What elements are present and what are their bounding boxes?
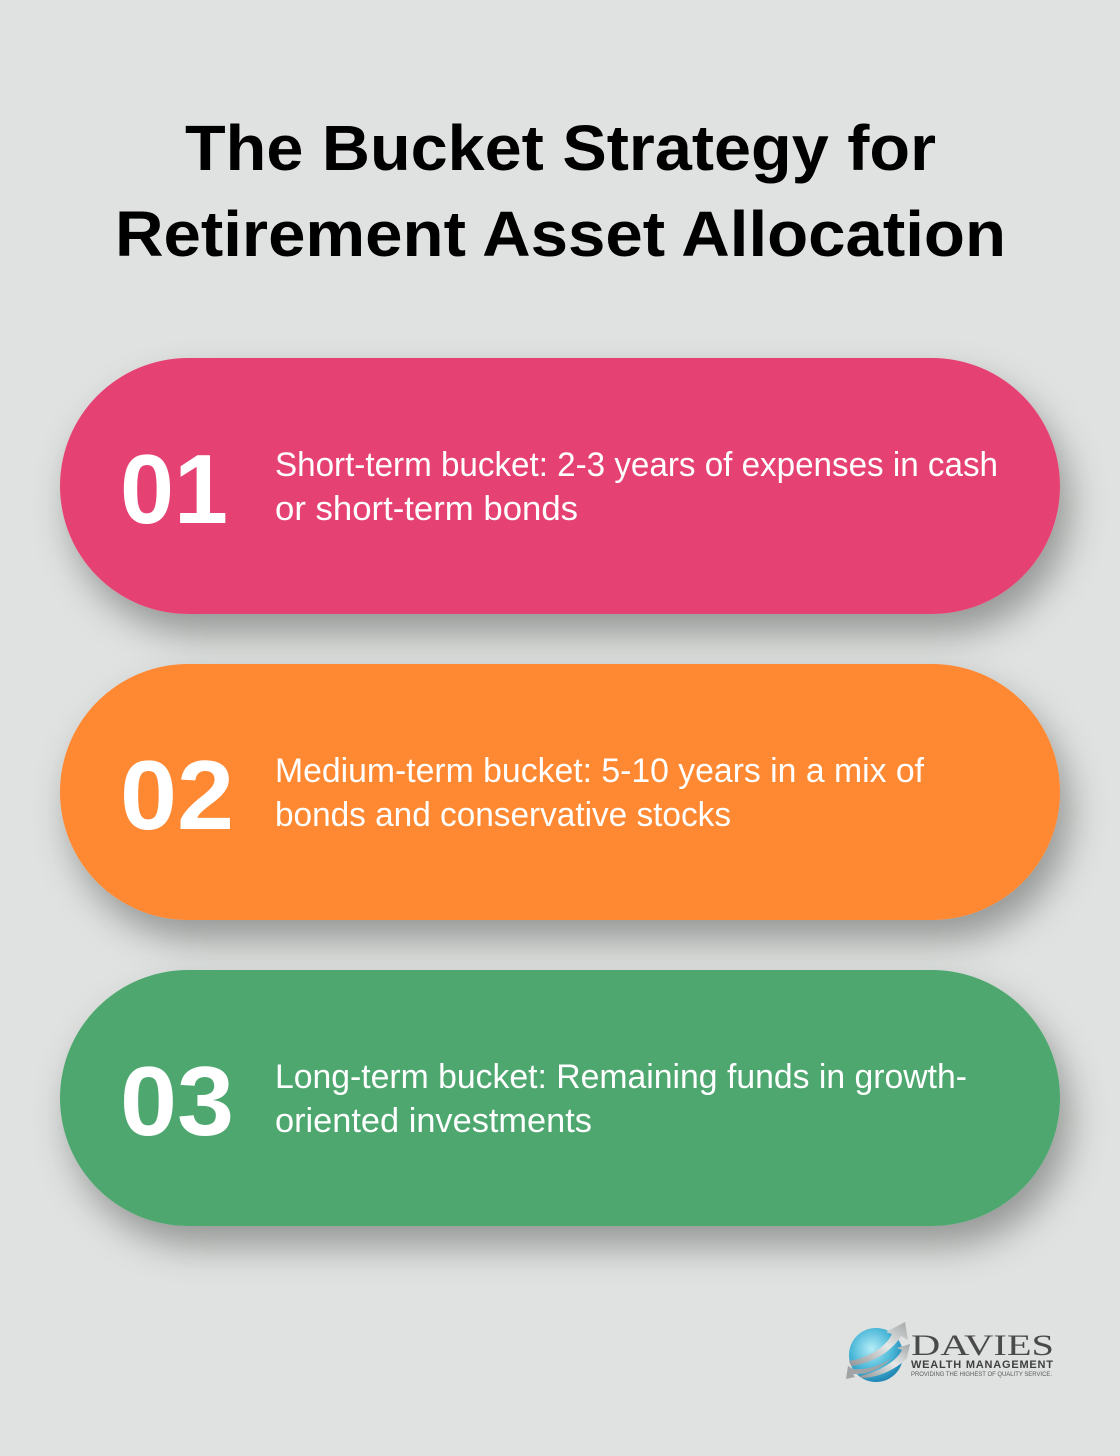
title: Retirement Asset Allocation <box>115 198 1006 270</box>
number 01: 01 <box>120 434 228 544</box>
pill: long-term background <box>60 970 1060 1226</box>
logo: Davies Wealth Management <box>846 1322 1054 1382</box>
text: short-term description: Short-term bucket: 2-3 years of expenses in cash <box>275 446 998 484</box>
title: The Bucket Strategy for <box>185 112 936 184</box>
number 02: 02 <box>120 740 234 850</box>
text: long-term description: Long-term bucket: Remaining funds in growth- <box>275 1058 967 1096</box>
logo subtitle: WEALTH MANAGEMENT <box>911 1359 1053 1371</box>
text: long-term description <box>275 1058 967 1140</box>
number 03: 03 <box>120 1046 234 1156</box>
text: medium-term description: bonds and conservative stocks <box>275 796 731 834</box>
panel: short-term bucket <box>60 358 1060 614</box>
title <box>115 112 1006 270</box>
text: long-term description: oriented investments <box>275 1102 592 1140</box>
text: medium-term description <box>275 752 925 834</box>
pill: short-term background <box>60 358 1060 614</box>
logo tagline: PROVIDING THE HIGHEST OF QUALITY SERVICE. <box>911 1371 1052 1378</box>
text: medium-term description: Medium-term bucket: 5-10 years in a mix of <box>275 752 925 790</box>
panel: long-term bucket <box>60 970 1060 1226</box>
logo name: DAVIES <box>911 1329 1054 1362</box>
icon: globe with arrows <box>846 1322 910 1382</box>
panel: medium-term bucket <box>60 664 1060 920</box>
text: short-term description: or short-term bonds <box>275 490 578 528</box>
text: short-term description <box>275 446 998 528</box>
pill: medium-term background <box>60 664 1060 920</box>
